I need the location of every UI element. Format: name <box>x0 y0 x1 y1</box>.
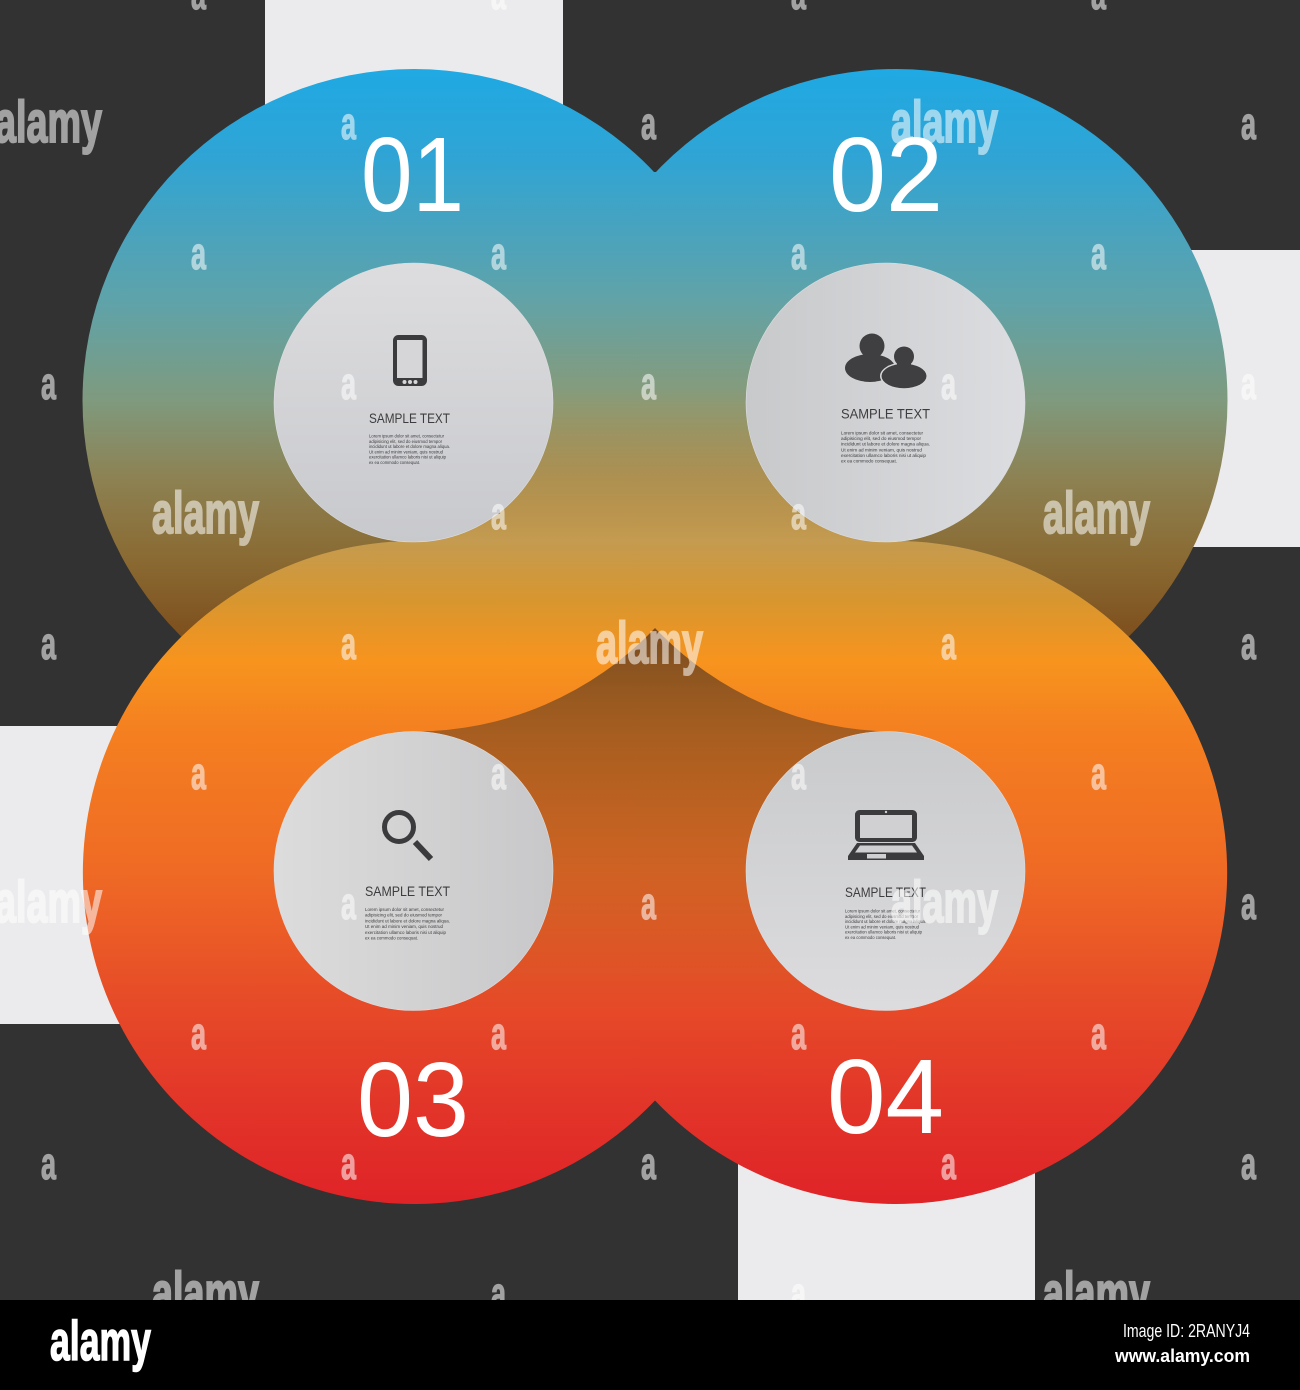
watermark small letters: a <box>641 98 657 149</box>
number 01: 01 <box>361 116 464 234</box>
body text 03: ex ea commodo consequat. <box>365 936 418 940</box>
heading 01: SAMPLE TEXT <box>369 410 450 426</box>
body text 03 <box>365 907 450 940</box>
icon: laptop <box>848 810 924 860</box>
watermark small letters: a <box>491 1008 507 1059</box>
body text 02: incididunt ut labore et dolore magna aliqua. <box>841 442 930 448</box>
watermark small letters: a <box>641 1138 657 1189</box>
body text 02: ex ea commodo consequat. <box>841 458 897 464</box>
body text 04: ex ea commodo consequat. <box>845 935 896 940</box>
watermark small letters: a <box>1241 358 1257 409</box>
panel 03: search <box>274 732 553 1010</box>
watermark small letters: a <box>341 358 357 409</box>
top of lower arch: upper circle bottoms over the lower band <box>414 628 896 1011</box>
watermark small letters: a <box>491 228 507 279</box>
body text 01: adipisicing elit, sed do eiusmod tempor <box>369 439 442 444</box>
watermark small letters: a <box>641 878 657 929</box>
small diamond at centre junction <box>646 628 662 645</box>
watermark small letters: a <box>791 1008 807 1059</box>
watermark large words: alamy <box>1043 1261 1150 1326</box>
watermark small letters: a <box>1241 98 1257 149</box>
centre glow between upper circles <box>414 263 886 542</box>
body text 04: exercitation ullamco laboris nisi ut aliquip <box>845 930 922 935</box>
watermark large words: alamy <box>1043 481 1150 546</box>
icon: smartphone <box>393 335 427 386</box>
watermark small letters: a <box>1241 1138 1257 1189</box>
body text 04: adipisicing elit, sed do eiusmod tempor <box>845 914 918 919</box>
body text 01: exercitation ullamco laboris nisi ut aliquip <box>369 455 446 460</box>
watermark small letters: a <box>341 878 357 929</box>
watermark small letters: a <box>491 1268 507 1319</box>
watermark small letters: a <box>191 228 207 279</box>
body text 01: Lorem ipsum dolor sit amet, consectetur <box>369 434 444 438</box>
watermark small letters: a <box>41 1138 57 1189</box>
watermark small letters: a <box>791 228 807 279</box>
body text 01: ex ea commodo consequat. <box>369 460 420 465</box>
watermark large words: alamy <box>891 870 998 935</box>
watermark small letters: a <box>191 748 207 799</box>
body text 02: Lorem ipsum dolor sit amet, consectetur <box>841 430 923 436</box>
icon: magnifier <box>384 812 431 859</box>
watermark small letters: a <box>41 618 57 669</box>
heading 03: SAMPLE TEXT <box>365 883 450 899</box>
panel 02: people <box>746 263 1025 542</box>
watermark small letters: a <box>941 1138 957 1189</box>
body text 02 <box>841 430 930 464</box>
body text 01: Ut enim ad minim veniam, quis nostrud <box>369 449 443 454</box>
footer bar <box>0 1300 1300 1390</box>
watermark small letters: a <box>491 748 507 799</box>
number 03: 03 <box>357 1041 469 1159</box>
watermark small letters: a <box>1091 1008 1107 1059</box>
watermark large words: alamy <box>152 1261 259 1326</box>
body text 04: Ut enim ad minim veniam, quis nostrud <box>845 924 919 929</box>
panel 01: phone <box>274 263 553 542</box>
watermark small letters: a <box>941 358 957 409</box>
number 04: 04 <box>827 1038 944 1156</box>
watermark small letters: a <box>791 488 807 539</box>
website: www.alamy.com <box>1114 1346 1250 1366</box>
circle 02 <box>746 263 1025 542</box>
watermark large words <box>0 90 1150 1326</box>
watermark small letters: a <box>1091 748 1107 799</box>
watermark small letters: a <box>791 1268 807 1319</box>
body text 03: adipisicing elit, sed do eiusmod tempor <box>365 913 442 918</box>
watermark large words: alamy <box>152 481 259 546</box>
body text 03: Lorem ipsum dolor sit amet, consectetur <box>365 907 444 912</box>
image id: Image ID: 2RANYJ4 <box>1123 1321 1250 1341</box>
lower circles band <box>83 541 1227 1204</box>
body text 01: incididunt ut labore et dolore magna aliqua. <box>369 444 450 449</box>
watermark small letters: a <box>341 1138 357 1189</box>
footer logo: alamy <box>50 1309 151 1372</box>
watermark small letters: a <box>491 488 507 539</box>
watermark large words: alamy <box>891 90 998 155</box>
upper circles band <box>82 69 1228 732</box>
body text 04: Lorem ipsum dolor sit amet, consectetur <box>845 908 920 914</box>
circle 04 <box>746 732 1025 1010</box>
watermark small letters: a <box>791 748 807 799</box>
watermark small letters: a <box>1091 228 1107 279</box>
circle 01 <box>274 263 553 542</box>
body text 03: exercitation ullamco laboris nisi ut aliquip <box>365 930 446 935</box>
watermark small letters: a <box>341 618 357 669</box>
body text 02: exercitation ullamco laboris nisi ut aliquip <box>841 453 926 459</box>
watermark large words: alamy <box>596 611 703 676</box>
body text 04: incididunt ut labore et dolore magna aliqua. <box>845 919 926 924</box>
body text 03: Ut enim ad minim veniam, quis nostrud <box>365 924 443 929</box>
number 02: 02 <box>829 116 943 234</box>
heading 04: SAMPLE TEXT <box>845 884 926 900</box>
body text 03: incididunt ut labore et dolore magna aliqua. <box>365 918 450 923</box>
heading 02: SAMPLE TEXT <box>841 406 930 422</box>
body text 02: adipisicing elit, sed do eiusmod tempor <box>841 436 921 442</box>
panel 04: laptop <box>746 732 1025 1010</box>
step numbers <box>357 116 944 1159</box>
watermark small letters: a <box>1241 618 1257 669</box>
watermark small letters: a <box>191 1008 207 1059</box>
watermark small letters: a <box>941 618 957 669</box>
body text 04 <box>845 908 926 940</box>
icon: people <box>845 334 928 390</box>
body text 01 <box>369 434 450 465</box>
watermark small letters: a <box>1241 878 1257 929</box>
watermark small letters: a <box>41 358 57 409</box>
watermark small letters: a <box>341 98 357 149</box>
body text 02: Ut enim ad minim veniam, quis nostrud <box>841 447 922 453</box>
circle 03 <box>274 732 553 1010</box>
watermark small letters: a <box>641 358 657 409</box>
